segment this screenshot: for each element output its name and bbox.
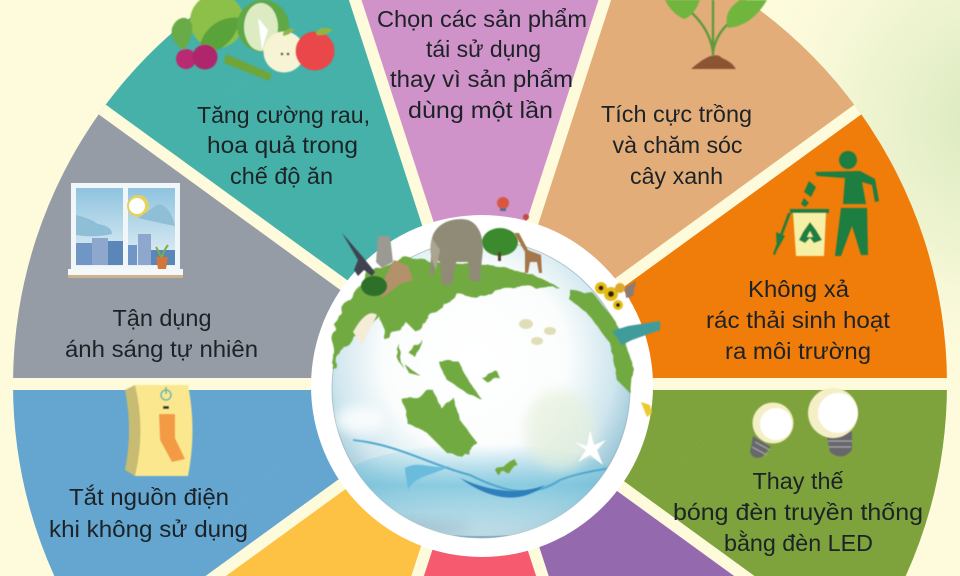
land: islands <box>396 340 518 475</box>
panel text: reuse products <box>377 6 587 123</box>
window sill <box>68 269 183 275</box>
panel text: plant trees: và chăm sóc <box>612 132 742 158</box>
panel: reuse products (pink) <box>355 0 605 384</box>
panel text: plant trees: Tích cực trồng <box>601 101 752 127</box>
land: Americas edge <box>570 290 633 393</box>
red apple <box>296 32 334 70</box>
star sparkle <box>575 430 606 465</box>
icon: power switch <box>125 385 192 476</box>
panel text: natural light: ánh sáng tự nhiên <box>65 336 258 362</box>
plant pot <box>156 257 168 269</box>
panel: no waste (orange) <box>480 110 947 384</box>
icon: yellow bird <box>641 402 652 417</box>
panel text: more vegetables <box>197 102 370 189</box>
faint watermarks: INFOGRAPHICS <box>265 253 330 332</box>
cabbage <box>190 0 244 48</box>
panel: turn off power (blue) <box>13 384 480 576</box>
panel text: no waste: Không xả <box>748 276 849 302</box>
icon: vegetables and fruit <box>172 0 334 81</box>
asparagus <box>224 54 272 81</box>
panel: plant trees (tan) <box>480 0 858 384</box>
panel text: plant trees: cây xanh <box>630 163 723 189</box>
panel: purple segment <box>480 384 744 576</box>
panel: natural light (gray) <box>13 110 480 384</box>
city buildings <box>76 234 175 265</box>
faint watermarks: INFOGRAPHICS <box>224 30 296 102</box>
icon: window with city view <box>68 183 183 278</box>
icon: bushes <box>361 276 387 296</box>
icon: sphinx <box>380 260 413 298</box>
panel text: reuse products: thay vì sản phẩm <box>390 66 573 92</box>
panel: LED bulbs (green) <box>480 384 947 576</box>
faint watermarks: TTXVN <box>644 76 679 112</box>
land: Asia <box>333 258 560 370</box>
icon: light bulbs <box>750 388 858 458</box>
icon: person throwing trash in bin <box>773 151 879 256</box>
sun <box>127 195 149 217</box>
icon: sprout <box>665 0 767 69</box>
panel text: reuse products: dùng một lần <box>408 97 553 123</box>
cloud highlight <box>353 313 377 345</box>
panel text: LED bulbs: bằng đèn LED <box>724 530 873 556</box>
icon: Eiffel tower <box>342 233 375 276</box>
sliced cabbage <box>237 0 289 52</box>
white ring behind globe <box>311 215 653 557</box>
panel text: LED bulbs <box>673 468 923 556</box>
land: New Guinea <box>437 360 482 400</box>
panel text: no waste: ra môi trường <box>725 338 871 364</box>
faint watermarks: INFOGRAPHICS <box>468 68 533 147</box>
panel text: no waste: rác thải sinh hoạt <box>706 307 891 333</box>
faint watermarks: TTXVN — VNA <box>220 461 286 527</box>
panel text: reuse products: Chọn các sản phẩm <box>377 6 587 32</box>
panel text: LED bulbs: bóng đèn truyền thống <box>673 499 923 525</box>
panel text: natural light <box>65 305 258 362</box>
faint watermarks <box>220 30 746 527</box>
panel text: turn off power: khi không sử dụng <box>49 516 248 542</box>
land: Australia <box>403 390 477 457</box>
sand islands <box>519 319 556 345</box>
panel text: natural light: Tận dụng <box>112 305 212 331</box>
panel text: turn off power <box>49 484 248 542</box>
panel text: no waste <box>706 276 891 364</box>
continents <box>333 258 633 475</box>
panel text: more vegetables: chế độ ăn <box>230 163 333 189</box>
icon: statue of liberty <box>612 321 660 345</box>
panel text: more vegetables: Tăng cường rau, <box>197 102 370 128</box>
radishes <box>176 49 196 69</box>
globe sphere <box>332 240 630 538</box>
panel: yellow segment <box>216 384 480 576</box>
panel: red segment <box>418 384 542 576</box>
icon: sunflowers <box>595 282 625 310</box>
radish leaves <box>172 18 192 50</box>
panel: more vegetables (teal) <box>102 0 480 384</box>
faint watermarks: INFOGRAPHICS <box>674 400 746 472</box>
panel text: turn off power: Tắt nguồn điện <box>69 484 229 510</box>
apple half <box>264 32 304 72</box>
globe illustration <box>330 197 660 538</box>
icon: giraffe <box>514 233 542 273</box>
clouds <box>76 215 112 236</box>
panel text: plant trees <box>601 101 752 189</box>
ocean water splash <box>330 390 631 537</box>
icon: trees <box>482 228 518 261</box>
panel text: LED bulbs: Thay thế <box>752 468 844 494</box>
panel text: reuse products: tái sử dụng <box>426 36 541 62</box>
panel text: more vegetables: hoa quả trong <box>207 132 358 158</box>
icon: butterfly <box>625 281 636 298</box>
icon: elephant <box>430 219 483 285</box>
icon: leaning tower <box>376 236 393 268</box>
icon: balloons <box>497 197 529 220</box>
